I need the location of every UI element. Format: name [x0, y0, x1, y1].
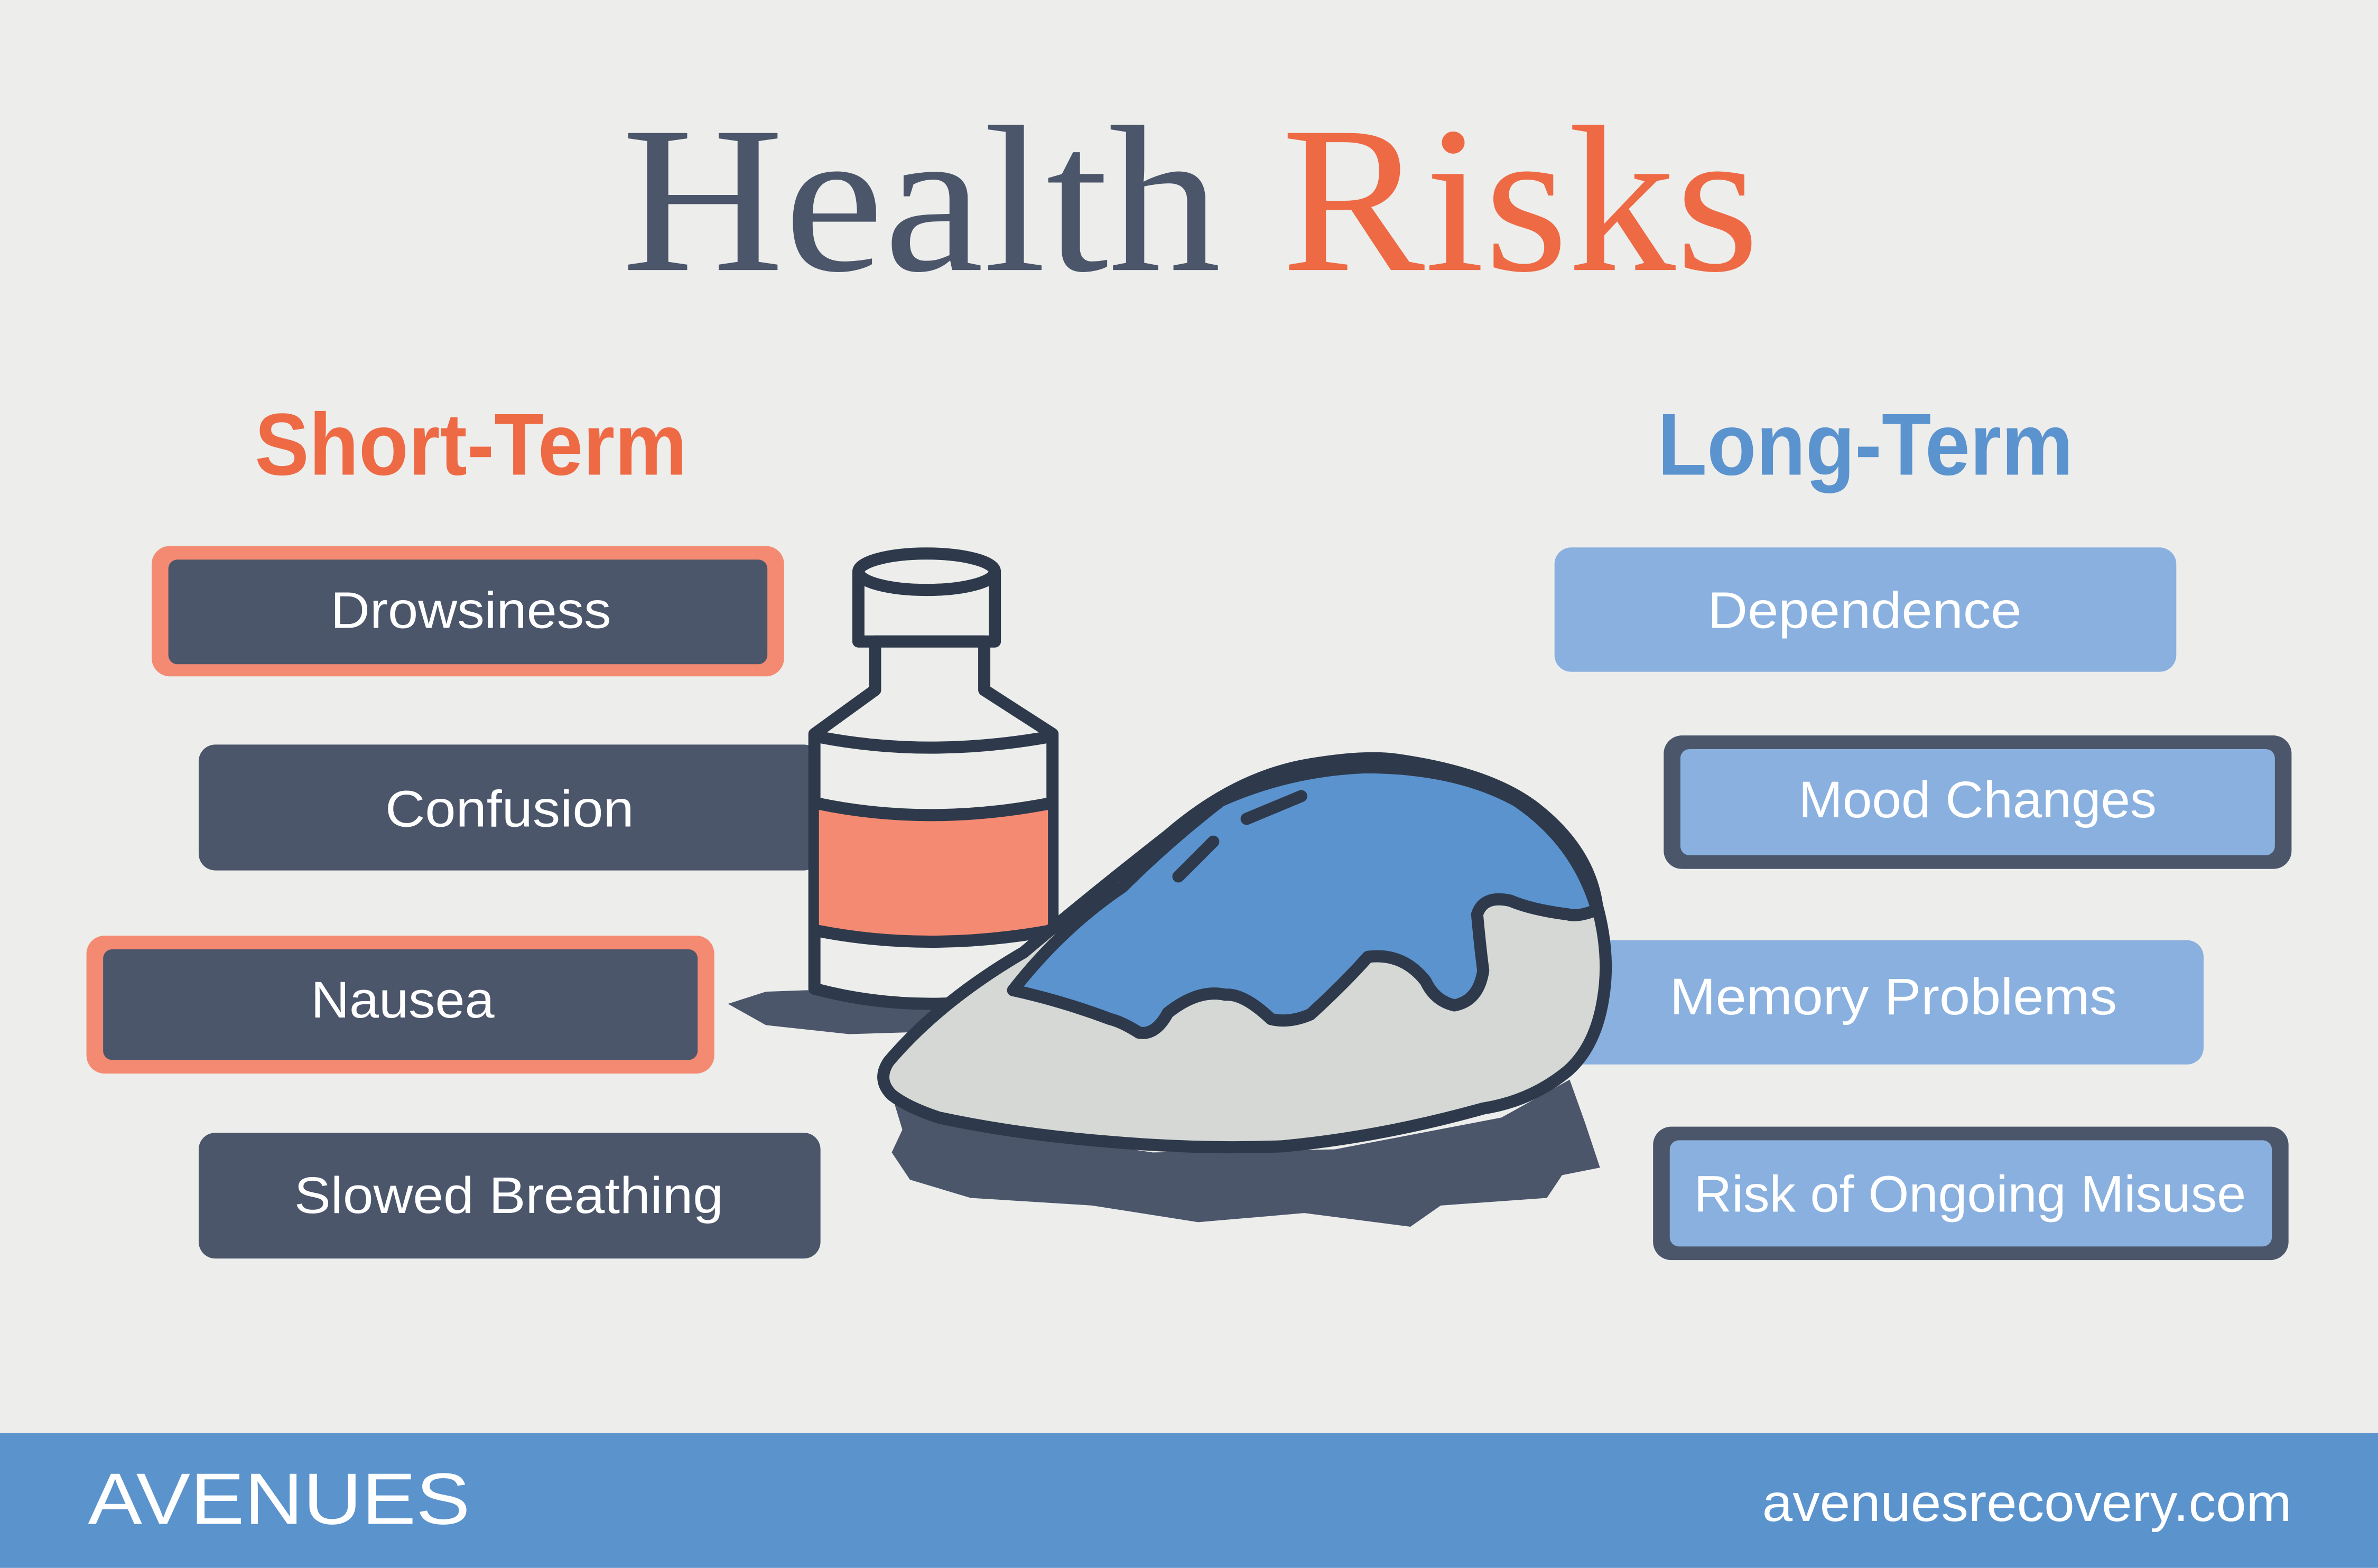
box: drowsiness [152, 546, 784, 676]
box: mood changes [1664, 735, 2291, 869]
box: slowed breathing [199, 1133, 821, 1258]
box: drowsiness: Drowsiness [331, 581, 611, 639]
box: memory problems: Memory Problems [1670, 968, 2117, 1025]
box: dependence [1555, 547, 2176, 672]
panel: short-term list [87, 546, 821, 1258]
logo: avenues: AVENUES [88, 1459, 470, 1540]
box: risk of ongoing misuse [1653, 1127, 2289, 1260]
shadow [728, 988, 1600, 1227]
box: nausea [87, 936, 714, 1074]
box: confusion [199, 744, 821, 871]
heading: long-term: Long-Term [1658, 396, 2073, 494]
footer [0, 1433, 2378, 1568]
url: avenuesrecovery.com [1762, 1473, 2291, 1533]
box: memory problems [1532, 940, 2204, 1065]
box: slowed breathing: Slowed Breathing [294, 1166, 723, 1224]
title: Risks [1281, 83, 1759, 315]
title: Health [622, 83, 1221, 315]
box: nausea: Nausea [311, 971, 495, 1029]
panel: long-term list [1532, 547, 2291, 1260]
box: mood changes: Mood Changes [1799, 771, 2157, 828]
bottle [814, 554, 1053, 1004]
box: confusion: Confusion [385, 780, 634, 837]
spill blob [884, 758, 1606, 1147]
title [622, 83, 1759, 315]
illustration: bottle and spill [728, 554, 1606, 1227]
box: dependence: Dependence [1708, 581, 2022, 639]
heading: short-term: Short-Term [255, 396, 687, 494]
box: risk of ongoing misuse: Risk of Ongoing Misuse [1694, 1165, 2246, 1222]
